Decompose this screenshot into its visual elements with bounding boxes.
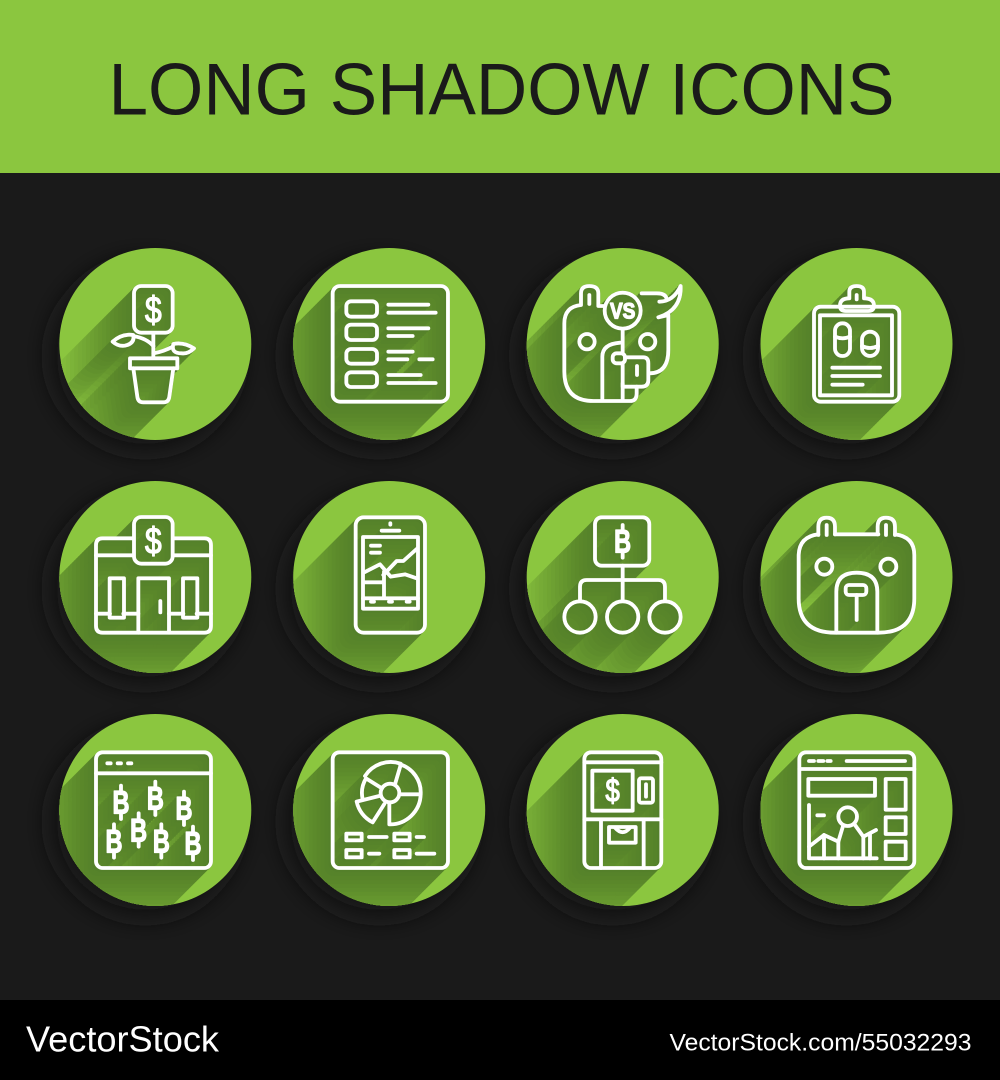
white line icons — [96, 286, 914, 868]
green circles — [59, 248, 953, 906]
icon: ATM machine — [584, 752, 661, 868]
long shadows inside circles — [18, 286, 914, 946]
header band — [0, 0, 1000, 173]
faint soft shadow on dark background — [49, 260, 943, 918]
title: LONG SHADOW ICONS — [108, 50, 894, 130]
icon: bitcoin network: B — [614, 524, 631, 560]
icon: clipboard with pills — [814, 286, 899, 402]
icon: ATM machine: $ — [606, 774, 620, 809]
icon: bear face — [799, 518, 914, 633]
icon: bank shop: $ — [145, 520, 162, 562]
footer band — [0, 1000, 1000, 1080]
icon: browser with bitcoin candlesticks: B — [113, 785, 129, 822]
icon: bitcoin network — [564, 517, 681, 633]
icon: smartphone with chart — [356, 517, 425, 633]
footer url: VectorStock.com/55032293 — [670, 1030, 972, 1056]
icon: analytics dashboard — [799, 752, 914, 868]
icon: browser with bitcoin candlesticks: B — [176, 791, 192, 828]
icon: pie chart report — [333, 752, 448, 868]
icon: bull versus bear — [564, 286, 681, 401]
icon: browser with bitcoin candlesticks: B — [185, 826, 201, 863]
icon: browser with bitcoin candlesticks: B — [147, 781, 164, 818]
icon: list document — [333, 286, 448, 402]
footer logo: VectorStock — [26, 1018, 220, 1060]
icon: money plant: $ — [145, 289, 162, 331]
icon: browser with bitcoin candlesticks: B — [106, 824, 122, 860]
icon: browser with bitcoin candlesticks — [96, 752, 211, 868]
icon: bull versus bear: VS — [610, 298, 635, 323]
icon: money plant — [113, 286, 194, 402]
icon: browser with bitcoin candlesticks: B — [130, 813, 147, 849]
icon: browser with bitcoin candlesticks: B — [153, 824, 170, 860]
icon: bank shop — [96, 517, 211, 633]
